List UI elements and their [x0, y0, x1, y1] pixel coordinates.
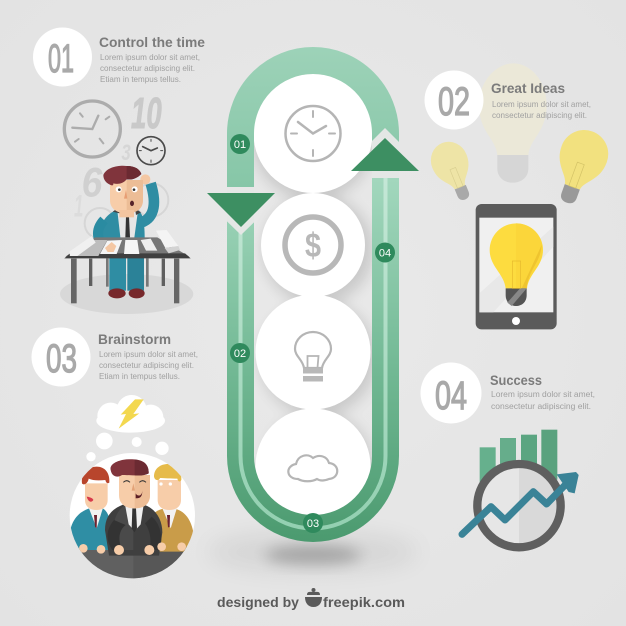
icon: freepik logo — [305, 588, 322, 607]
icon: screen bulb — [490, 223, 543, 306]
desk legs back — [89, 259, 165, 286]
arrow: down — [207, 193, 275, 235]
footer credit: freepik.com — [323, 594, 405, 610]
icon: dollar coin: $ — [305, 227, 321, 265]
icon: cloud — [288, 455, 337, 481]
badge 04 — [375, 242, 395, 262]
badge 02: 02 — [234, 348, 246, 360]
badge 02 — [230, 343, 250, 363]
text block 04: Lorem ipsum dolor sit amet, — [491, 389, 595, 399]
text block 02 — [492, 99, 591, 120]
panel: step 04 heading — [420, 362, 595, 424]
person: right — [154, 464, 193, 552]
badge 01 — [230, 134, 250, 154]
badge 01: 01 — [234, 139, 246, 151]
text block 01: Lorem ipsum dolor sit amet, — [100, 52, 200, 62]
thought cloud — [86, 395, 169, 461]
icon: tablet — [476, 204, 557, 329]
illustration: chart under magnifier — [462, 430, 579, 548]
text block 03 — [99, 349, 198, 381]
panel: lower green track — [240, 176, 386, 528]
number circle 02 — [424, 70, 484, 130]
icon: clock — [286, 106, 340, 161]
icon: pale large bulb — [479, 63, 547, 183]
text block 03: Etiam in tempus tellus. — [99, 371, 180, 381]
text block 01 — [100, 52, 200, 84]
number circle 04 — [420, 362, 482, 424]
text block 04 — [491, 389, 595, 411]
icon: big clock — [64, 101, 120, 157]
illustration: overwhelmed man at desk — [60, 89, 193, 314]
badge 04: 04 — [379, 248, 391, 260]
magnifier ring — [477, 463, 561, 548]
falling numbers — [74, 89, 162, 224]
panel: step 02 illustration bulbs — [425, 63, 615, 329]
text block 02: consectetur adipiscing elit. — [492, 110, 587, 120]
icon: small clock — [137, 137, 165, 165]
text block 02: Lorem ipsum dolor sit amet, — [492, 99, 591, 109]
text block 03: consectetur adipiscing elit. — [99, 360, 194, 370]
text block 04: consectetur adipiscing elit. — [491, 401, 591, 411]
ground shadow — [208, 532, 418, 572]
number circle 03 — [32, 328, 90, 386]
title: brainstorm: Brainstorm — [98, 331, 171, 347]
person: centre — [105, 459, 162, 556]
man torso — [98, 174, 154, 248]
number circle 03: 03 — [46, 337, 77, 381]
badge 03 — [303, 513, 323, 533]
title: control the time: Control the time — [99, 34, 205, 50]
panel: white step circles — [254, 74, 372, 524]
footer credit — [217, 588, 405, 610]
faint clocks — [85, 183, 168, 239]
text block 03: Lorem ipsum dolor sit amet, — [99, 349, 198, 359]
circle shadows — [253, 80, 376, 520]
icon: light bulb — [295, 332, 331, 382]
falling numbers: 6 — [82, 159, 103, 206]
man lower body — [106, 253, 149, 298]
text block 01: consectetur adipiscing elit. — [100, 63, 195, 73]
icon: lightning bolt — [119, 399, 144, 429]
icon: left bulb — [425, 136, 482, 206]
falling numbers: 10 — [131, 89, 162, 138]
man head — [103, 166, 143, 217]
footer credit: designed by — [217, 594, 299, 610]
arrow: up — [348, 128, 422, 178]
bar chart — [480, 430, 557, 487]
panel: step 02 heading — [424, 70, 591, 130]
title: success: Success — [490, 372, 542, 388]
icon: dollar coin — [285, 217, 341, 273]
trend arrow — [462, 472, 579, 534]
title: great ideas: Great Ideas — [491, 80, 565, 96]
falling numbers: 1 — [74, 188, 83, 224]
icon: right bulb — [544, 123, 615, 211]
desk — [64, 230, 191, 303]
illustration: brainstorm team — [67, 395, 200, 583]
text block 01: Etiam in tempus tellus. — [100, 74, 181, 84]
panel: step 03 heading — [32, 328, 198, 386]
panel: upper green arch — [240, 61, 386, 187]
falling numbers: 3 — [121, 140, 131, 165]
number circle 01 — [33, 28, 92, 86]
team circle — [70, 453, 195, 578]
person: left — [69, 467, 113, 550]
number circle 02: 02 — [438, 80, 470, 124]
panel: step 01 heading — [33, 28, 205, 86]
number circle 01: 01 — [48, 37, 74, 81]
hands — [79, 542, 186, 555]
number circle 04: 04 — [435, 374, 467, 418]
badge 03: 03 — [307, 518, 319, 530]
